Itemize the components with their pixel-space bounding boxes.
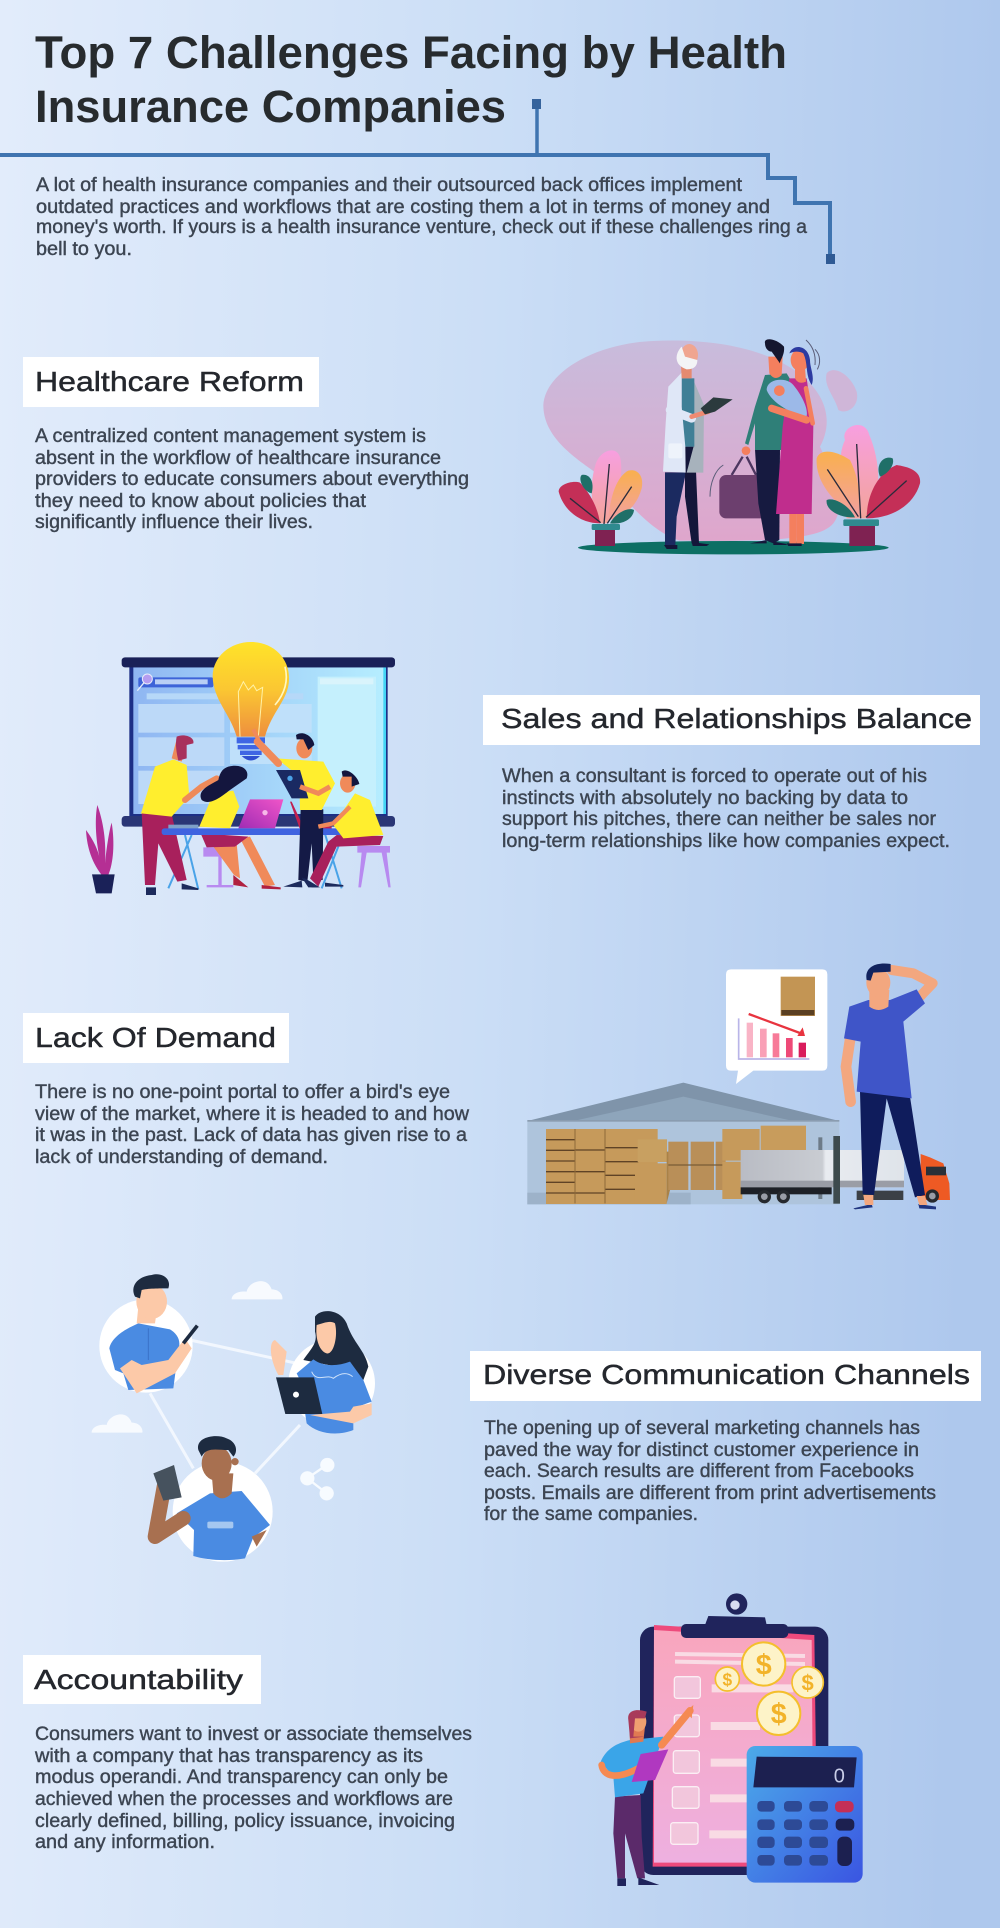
intro text: money's worth. If yours is a health insurance venture, check out if these challenges ring a [36, 217, 807, 238]
laptops and table top [162, 799, 358, 835]
person: woman at laptop [199, 766, 281, 889]
panel: Lack Of Demand [23, 1013, 469, 1168]
heading [23, 1655, 261, 1704]
text block [34, 1724, 472, 1853]
coins: $ [756, 1649, 772, 1681]
light bulb [213, 642, 289, 760]
coins: $ [802, 1671, 814, 1696]
text block: and any information. [35, 1832, 215, 1853]
father [742, 339, 792, 545]
heading [470, 1351, 981, 1401]
pointing man [601, 1705, 693, 1886]
illustration: connected people [92, 1274, 375, 1562]
text block [35, 1082, 469, 1168]
heading: Sales and Relationships Balance [501, 703, 972, 734]
connection lines and circles [99, 1299, 375, 1562]
clipboard [640, 1593, 828, 1875]
person: standing man with tablet [253, 729, 335, 887]
text block: each. Search results are different from Facebooks [484, 1461, 914, 1482]
text block: support his pitches, there can neither be sales nor [502, 809, 937, 830]
text block: clearly defined, billing, policy issuance, invoicing [35, 1811, 455, 1832]
calculator: 0 [834, 1766, 845, 1788]
text block: The opening up of several marketing channels has [484, 1418, 920, 1439]
text block: long-term relationships like how companies expect. [502, 831, 950, 852]
intro text [36, 175, 807, 260]
person: man with phone [109, 1274, 197, 1393]
coins: $ [771, 1699, 787, 1731]
heading: Diverse Communication Channels [483, 1359, 970, 1390]
person: woman with laptop [271, 1311, 372, 1433]
stacked boxes [546, 1126, 822, 1204]
heading: Accountability [34, 1664, 243, 1695]
text block: absent in the workflow of healthcare insurance [35, 448, 441, 469]
text block: Consumers want to invest or associate themselves [35, 1724, 472, 1745]
text block: There is no one-point portal to offer a bird's eye [35, 1082, 450, 1103]
presentation screen [122, 657, 395, 827]
text block: with a company that has transparency as its [34, 1746, 423, 1767]
plant right [817, 425, 920, 546]
truck [741, 1136, 950, 1204]
text block: it was in the past. Lack of data has given rise to a [35, 1125, 467, 1146]
person: man with tablet [153, 1436, 270, 1560]
heading: Lack Of Demand [35, 1022, 276, 1053]
heading: Healthcare Reform [35, 366, 304, 397]
illustration: warehouse and confused man [527, 963, 950, 1209]
illustration: doctor and family [543, 339, 920, 554]
confused man [844, 963, 936, 1209]
clouds [92, 1281, 282, 1433]
text block: posts. Emails are different from print advertisements [484, 1483, 936, 1504]
panel: Diverse Communication Channels [470, 1351, 981, 1525]
intro text: A lot of health insurance companies and their outsourced back offices implement [36, 175, 743, 196]
coins [715, 1642, 823, 1735]
share icon [300, 1458, 334, 1500]
heading [23, 1013, 289, 1063]
title [35, 27, 787, 132]
text block: achieved when the processes and workflows are [35, 1789, 453, 1810]
bag [710, 457, 771, 518]
person: bearded man [141, 735, 217, 895]
text block: they need to know about policies that [35, 491, 367, 512]
panel: Healthcare Reform [23, 357, 469, 533]
text block: lack of understanding of demand. [35, 1147, 328, 1168]
warehouse [527, 1083, 839, 1204]
intro text: bell to you. [36, 239, 132, 260]
calculator [747, 1746, 863, 1883]
mother with baby [767, 340, 820, 546]
doctor [663, 344, 733, 549]
panel: Sales and Relationships Balance [483, 695, 980, 852]
plant left [559, 450, 642, 546]
title: Insurance Companies [35, 81, 506, 132]
table legs [168, 834, 343, 889]
text block: modus operandi. And transparency can only be [35, 1767, 448, 1788]
text block: significantly influence their lives. [35, 512, 313, 533]
text block [484, 1418, 936, 1525]
text block: When a consultant is forced to operate out of his [502, 766, 927, 787]
text block: for the same companies. [484, 1504, 698, 1525]
text block: instincts with absolutely no backing by data to [502, 788, 908, 809]
text block: providers to educate consumers about everything [35, 469, 469, 490]
stepped connector line [0, 99, 835, 264]
heading [23, 357, 319, 407]
coins: $ [723, 1669, 733, 1689]
text block [502, 766, 950, 852]
illustration: team with light bulb [86, 642, 395, 895]
potted plant [86, 805, 115, 893]
text block: A centralized content management system is [35, 426, 426, 447]
panel: Accountability [23, 1655, 472, 1853]
person: seated man [302, 770, 391, 887]
title: Top 7 Challenges Facing by Health [35, 27, 787, 78]
text block [35, 426, 469, 533]
text block: view of the market, where it is headed to and how [35, 1104, 469, 1125]
intro text: outdated practices and workflows that are costing them a lot in terms of money and [36, 197, 770, 218]
text block: paved the way for distinct customer experience in [484, 1440, 919, 1461]
speech bubble with falling chart [726, 969, 827, 1084]
heading [483, 695, 980, 745]
illustration: clipboard, coins and calculator [601, 1593, 863, 1886]
